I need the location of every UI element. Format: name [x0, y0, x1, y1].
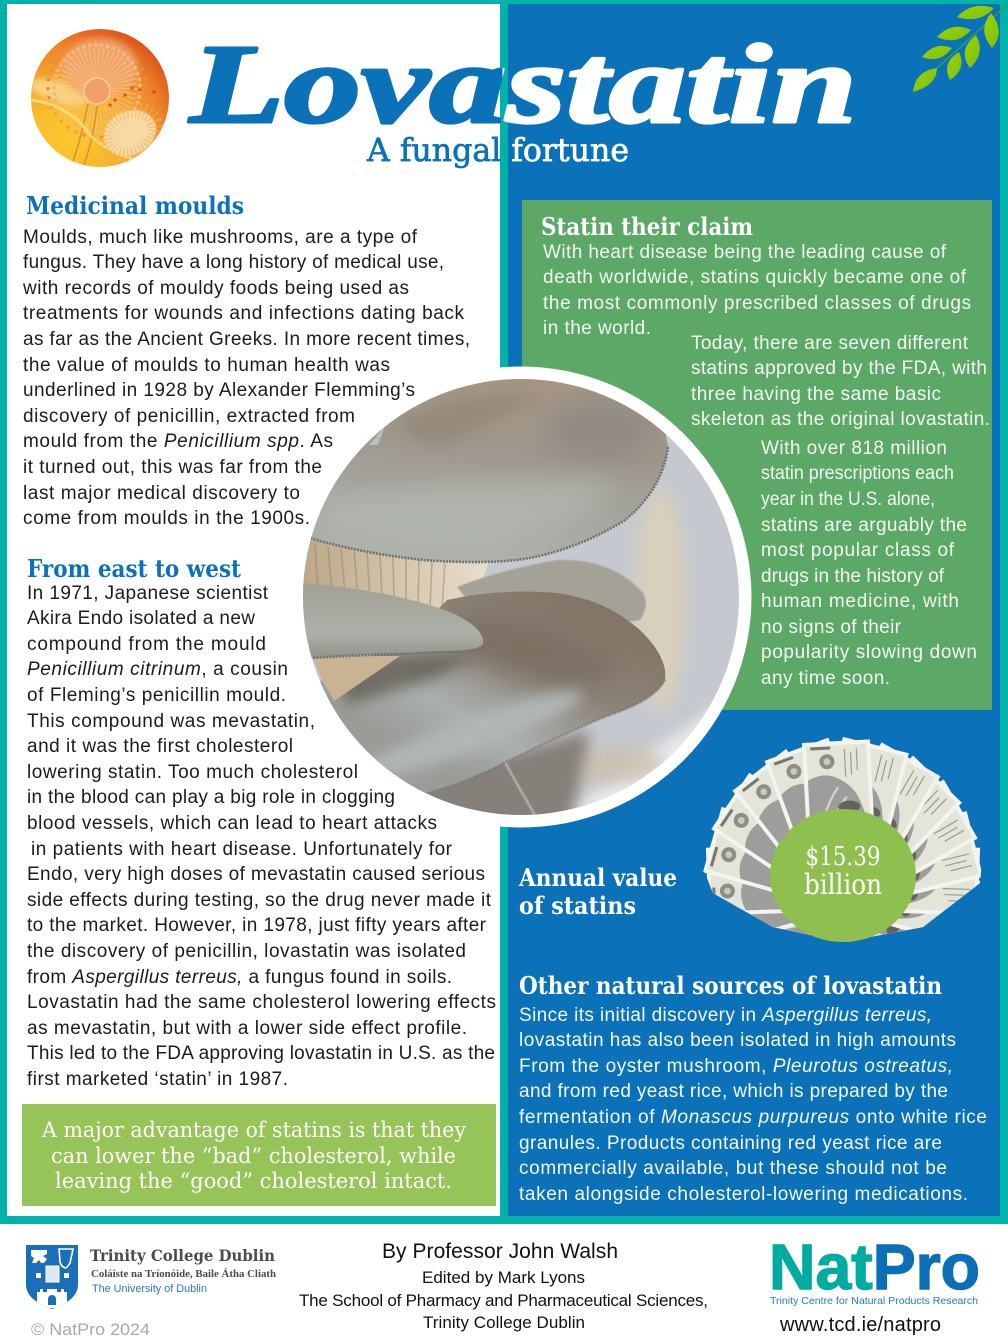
text block: seven statins — [691, 333, 990, 430]
text block: from east to west: In 1971, Japanese scientist — [27, 583, 269, 604]
text block: 818 million prescriptions: statin prescriptions each — [761, 463, 954, 484]
text block: other natural sources: lovastatin has also been isolated in high amounts — [519, 1030, 956, 1051]
text block: seven statins: skeleton as the original lovastatin. — [691, 409, 990, 430]
text block: 818 million prescriptions: human medicine, with — [761, 591, 959, 612]
text block: medicinal moulds: Moulds, much like mushrooms, are a type of — [23, 227, 418, 248]
text block: medicinal moulds: with records of mouldy foods being used as — [22, 278, 409, 299]
badge: annual value amount: billion — [804, 868, 882, 901]
heading: from east to west: From east to west — [27, 554, 241, 583]
text block: from east to west: Akira Endo isolated a new — [27, 608, 255, 629]
heading: statin their claim: Statin their claim — [541, 212, 753, 241]
credits — [299, 1240, 708, 1332]
logo: NatPro: NatPro — [769, 1231, 980, 1303]
website: www.tcd.ie/natpro — [779, 1314, 941, 1336]
text block: 818 million prescriptions: statins are arguably the — [761, 515, 967, 536]
panel: white left column — [7, 4, 500, 1216]
text block: medicinal moulds: come from moulds in the 1900s. — [23, 508, 310, 529]
text block: statin their claim intro: the most commonly prescribed classes of drugs — [543, 293, 971, 314]
image: fan of dollar bills — [703, 736, 982, 942]
label: annual value of statins — [518, 863, 677, 920]
text block: medicinal moulds: as far as the Ancient Greeks. In more recent times, — [23, 329, 470, 350]
text block: seven statins: statins approved by the FDA, with — [691, 358, 987, 379]
text block: 818 million prescriptions: popularity slowing down — [761, 642, 977, 663]
text block: medicinal moulds: last major medical discovery to — [23, 483, 300, 504]
credits: Edited by Mark Lyons — [422, 1268, 585, 1287]
logo text: Trinity College Dublin: The University of Dublin — [92, 1283, 207, 1295]
logo: Trinity College Dublin shield — [26, 1245, 78, 1309]
text block: medicinal moulds: mould from the Penicillium spp. As — [23, 431, 333, 452]
text block: from east to west: This led to the FDA approving lovastatin in U.S. as the — [27, 1043, 495, 1064]
text block: from east to west: compound from the mould — [27, 634, 266, 655]
panel: blue right column — [508, 4, 1000, 1216]
logo text: Trinity College Dublin — [90, 1246, 276, 1295]
text block: statin their claim intro: in the world. — [543, 318, 651, 339]
text block: from east to west: This compound was mevastatin, — [27, 711, 315, 732]
text block: from east to west: in the blood can play a big role in clogging — [27, 787, 395, 808]
credits: Trinity College Dublin — [423, 1313, 585, 1332]
text block: from east to west: first marketed ‘statin’ in 1987. — [27, 1069, 288, 1090]
text block: 818 million prescriptions: most popular class of — [761, 540, 955, 561]
text block: 818 million prescriptions — [761, 438, 977, 689]
text block: from east to west: Lovastatin had the same cholesterol lowering effects — [27, 992, 496, 1013]
text block: other natural sources: and from red yeast rice, which is prepared by the — [519, 1081, 948, 1102]
credits: By Professor John Walsh — [382, 1240, 618, 1263]
text block: other natural sources: fermentation of Monascus purpureus onto white rice — [519, 1107, 987, 1128]
middle small cap — [296, 583, 483, 658]
text block: 818 million prescriptions: With over 818 million — [761, 438, 947, 459]
text block: seven statins: Today, there are seven different — [691, 333, 969, 354]
logo text: Trinity College Dublin: Trinity College Dublin — [90, 1246, 275, 1265]
icon: fungus micrograph circle — [26, 29, 169, 170]
callout: major advantage of statins — [22, 1104, 496, 1206]
callout: major advantage of statins: A major advantage of statins is that they — [41, 1118, 466, 1142]
credits: The School of Pharmacy and Pharmaceutical Sciences, — [299, 1291, 708, 1310]
text block: from east to west — [27, 583, 496, 1090]
text block: statin their claim intro: With heart disease being the leading cause of — [543, 242, 947, 263]
heading: medicinal moulds: Medicinal moulds — [26, 191, 244, 220]
text block: from east to west: of Fleming’s penicillin mould. — [27, 685, 286, 706]
text block: seven statins: three having the same basic — [691, 384, 941, 405]
text block: medicinal moulds — [22, 227, 470, 529]
text block: medicinal moulds: underlined in 1928 by Alexander Flemming’s — [23, 380, 415, 401]
callout: major advantage of statins: can lower the “bad” cholesterol, while — [51, 1144, 456, 1168]
footer background — [0, 1224, 1008, 1344]
text block: from east to west: the discovery of penicillin, lovastatin was isolated — [27, 941, 466, 962]
top cap — [290, 375, 668, 562]
badge: annual value amount: $15.39 — [806, 842, 880, 872]
text block: from east to west: from Aspergillus terreus, a fungus found in soils. — [27, 967, 452, 988]
text block: other natural sources: granules. Products containing red yeast rice are — [519, 1133, 942, 1154]
icon: leafy branch — [913, 4, 1008, 92]
text block: 818 million prescriptions: any time soon. — [761, 668, 890, 689]
callout: major advantage of statins: leaving the “good” cholesterol intact. — [55, 1169, 452, 1193]
text block: from east to west: in patients with heart disease. Unfortunately for — [31, 839, 453, 860]
text block: from east to west: lowering statin. Too much cholesterol — [27, 762, 358, 783]
text block: medicinal moulds: fungus. They have a long history of medical use, — [23, 252, 444, 273]
text block: medicinal moulds: discovery of penicillin, extracted from — [23, 406, 355, 427]
lower gills — [312, 656, 400, 701]
text block: from east to west: blood vessels, which can lead to heart attacks — [27, 813, 437, 834]
text block: medicinal moulds: treatments for wounds and infections dating back — [23, 303, 464, 324]
text block: other natural sources: commercially available, but these should not be — [519, 1158, 947, 1179]
text block: 818 million prescriptions: drugs in the history of — [761, 566, 945, 587]
text block: from east to west: to the market. However, in 1978, just fifty years after — [27, 915, 487, 936]
text block: medicinal moulds: the value of moulds to human health was — [23, 355, 390, 376]
image: oyster mushrooms in white ring — [290, 366, 752, 830]
text block: other natural sources: From the oyster mushroom, Pleurotus ostreatus, — [519, 1056, 953, 1077]
subtitle: A fungal fortune — [366, 131, 629, 169]
text block: from east to west: side effects during testing, so the drug never made it — [27, 890, 492, 911]
text block: statin their claim intro — [543, 242, 971, 339]
badge: annual value amount — [770, 809, 916, 942]
text block: 818 million prescriptions: no signs of their — [761, 617, 902, 638]
stem below — [400, 730, 590, 830]
heading: other natural sources: Other natural sources of lovastatin — [519, 971, 942, 1000]
text block: medicinal moulds: it turned out, this was far from the — [23, 457, 322, 478]
label: annual value of statins: Annual value — [518, 863, 677, 892]
copyright: © NatPro 2024 — [31, 1320, 150, 1339]
logo: NatPro: Trinity Centre for Natural Products Research — [770, 1295, 978, 1307]
text block: 818 million prescriptions: year in the U.S. alone, — [761, 489, 935, 510]
text block: from east to west: as mevastatin, but with a lower side effect profile. — [27, 1018, 467, 1039]
label: annual value of statins: of statins — [519, 891, 636, 920]
text block: other natural sources: taken alongside cholesterol-lowering medications. — [519, 1184, 968, 1205]
text block: from east to west: Endo, very high doses of mevastatin caused serious — [27, 864, 485, 885]
text block: statin their claim intro: death worldwide, statins quickly became one of — [543, 267, 967, 288]
panel: statin their claim green box — [522, 200, 992, 710]
text block: from east to west: Penicillium citrinum, a cousin — [27, 659, 288, 680]
title: Lovastatin — [189, 22, 857, 147]
gills — [300, 535, 490, 610]
text block: other natural sources: Since its initial discovery in Aspergillus terreus, — [519, 1005, 932, 1026]
back cap — [456, 559, 646, 622]
text block: from east to west: and it was the first cholesterol — [27, 736, 293, 757]
text block: other natural sources — [519, 1005, 987, 1205]
logo text: Trinity College Dublin: Coláiste na Tríonóide, Baile Átha Cliath — [91, 1268, 276, 1280]
big lower cap — [300, 592, 665, 800]
